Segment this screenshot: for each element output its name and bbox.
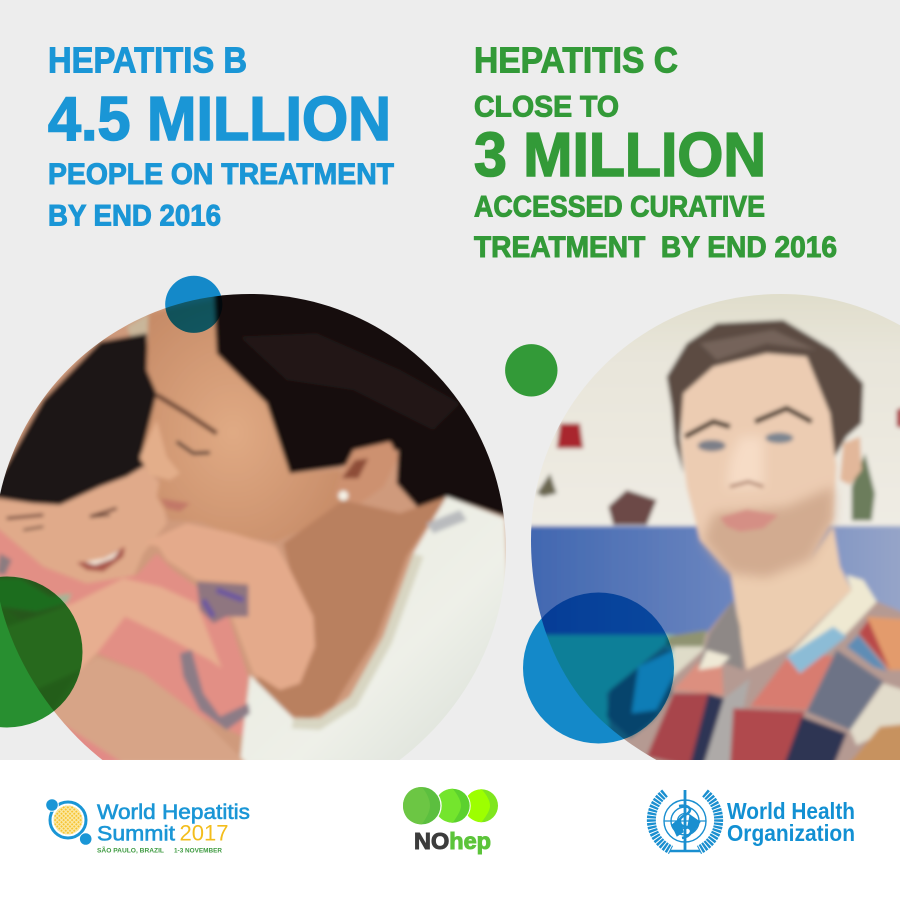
big number: 4.5 million: 4.5 MILLION [48, 85, 391, 154]
logo: World Health Organization [651, 790, 855, 851]
icon: WHO emblem [651, 790, 719, 851]
circle: large blue accent [523, 592, 674, 744]
text: Summit: Summit [97, 822, 175, 846]
text: 2017: 2017 [180, 820, 228, 846]
heading: Hepatitis B: HEPATITIS B [48, 40, 247, 80]
heading block: Hepatitis C [474, 40, 837, 264]
icon: three green circles [402, 786, 498, 826]
logo: World Hepatitis Summit 2017 [46, 799, 250, 854]
text: World Hepatitis: World Hepatitis [97, 801, 250, 824]
heading: Hepatitis C: HEPATITIS C [474, 40, 678, 80]
icon: summit globe [46, 799, 92, 845]
text: close to: CLOSE TO [474, 90, 619, 124]
text: people on treatment: PEOPLE ON TREATMENT [48, 158, 394, 191]
photo: mother and child [0, 270, 523, 763]
big number: 3 million: 3 MILLION [474, 121, 766, 190]
text: Organization: Organization [727, 820, 855, 846]
circle: small blue accent [165, 276, 222, 333]
text: location: SÃO PAULO, BRAZIL [97, 845, 164, 854]
panel: footer band [0, 760, 900, 900]
text: NOhep: NOhep [414, 828, 491, 854]
logo: NOhep [402, 786, 498, 854]
text: treatment by end 2016: TREATMENT BY END 2016 [474, 231, 837, 264]
text: World Health: World Health [727, 798, 855, 824]
text: by end 2016: BY END 2016 [48, 200, 221, 232]
photo: young man [520, 280, 900, 768]
circle: large green accent [0, 576, 82, 728]
heading block: Hepatitis B [48, 40, 394, 232]
text: accessed curative: ACCESSED CURATIVE [474, 190, 765, 224]
circle: small green accent [505, 344, 558, 396]
text: dates: 1-3 NOVEMBER [174, 847, 222, 854]
